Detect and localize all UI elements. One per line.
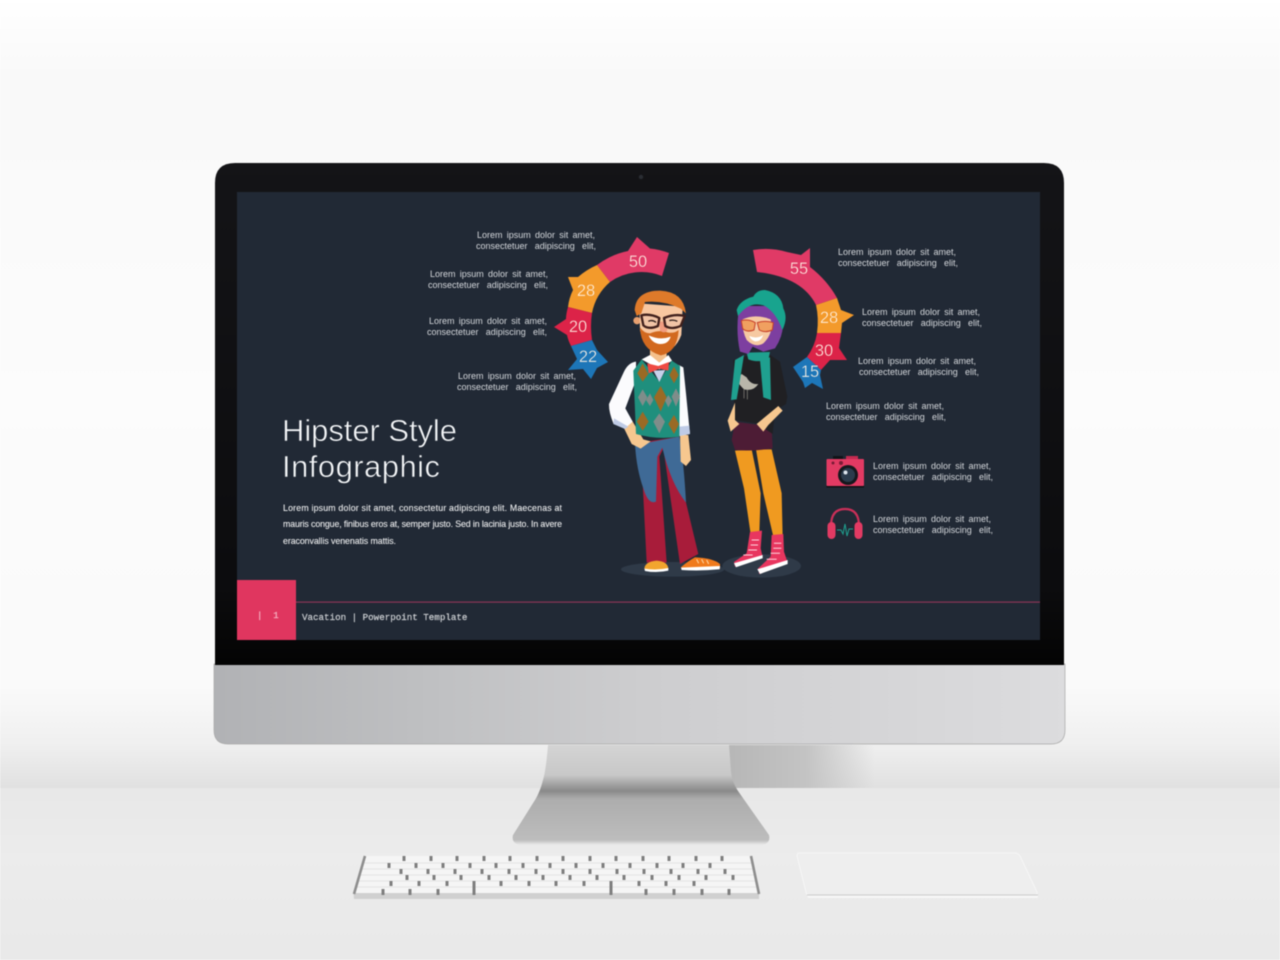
title: Infographic xyxy=(282,449,440,484)
left callouts: Lorem ipsum dolor sit amet, xyxy=(430,269,548,279)
footer page block xyxy=(237,580,296,640)
left callouts: Lorem ipsum dolor sit amet, xyxy=(429,316,547,326)
right callouts: Lorem ipsum dolor sit amet, xyxy=(838,247,956,257)
webcam xyxy=(639,175,643,179)
footer xyxy=(237,580,1040,640)
man arms xyxy=(609,362,691,466)
monitor stand xyxy=(513,745,769,845)
segment 55 xyxy=(753,248,837,305)
value labels: 22 xyxy=(579,348,597,366)
left callouts: consectetuer adipiscing elit, xyxy=(457,382,577,392)
man head xyxy=(633,291,686,355)
value labels: 50 xyxy=(629,253,647,271)
monitor bezel xyxy=(215,163,1064,665)
left callouts xyxy=(427,230,596,392)
woman arms xyxy=(728,403,783,432)
segment 22 xyxy=(568,340,608,379)
right callouts: consectetuer adipiscing elit, xyxy=(859,367,979,377)
left callouts: consectetuer adipiscing elit, xyxy=(427,327,547,337)
bird print xyxy=(736,374,758,399)
left callouts: Lorem ipsum dolor sit amet, xyxy=(458,371,576,381)
right callouts: Lorem ipsum dolor sit amet, xyxy=(862,307,980,317)
icon camera text: Lorem ipsum dolor sit amet, xyxy=(873,461,991,471)
left arc chart xyxy=(554,237,669,379)
segment 20 xyxy=(554,307,592,346)
slide screen xyxy=(237,192,1040,640)
title: Hipster Style xyxy=(282,413,457,448)
man shoes xyxy=(644,557,720,572)
monitor chin xyxy=(214,664,1065,744)
icon camera text: consectetuer adipiscing elit, xyxy=(873,472,993,482)
value labels: 20 xyxy=(569,318,587,336)
keyboard xyxy=(354,856,759,899)
value labels: 55 xyxy=(790,260,808,278)
icon headphones text: Lorem ipsum dolor sit amet, xyxy=(873,514,991,524)
segment 15 xyxy=(793,357,823,389)
icon headphones text xyxy=(873,514,993,535)
segment 28 xyxy=(816,298,854,333)
body paragraph xyxy=(283,503,563,546)
right arc chart xyxy=(753,248,854,389)
segment 50 xyxy=(597,237,669,282)
footer rule xyxy=(296,602,1040,603)
left callouts: consectetuer adipiscing elit, xyxy=(428,280,548,290)
man trousers xyxy=(635,437,698,564)
right callouts: consectetuer adipiscing elit, xyxy=(838,258,958,268)
man vest xyxy=(633,359,680,438)
right callouts: consectetuer adipiscing elit, xyxy=(826,412,946,422)
right callouts: Lorem ipsum dolor sit amet, xyxy=(858,356,976,366)
icon headphones text: consectetuer adipiscing elit, xyxy=(873,525,993,535)
value labels xyxy=(790,260,838,381)
body paragraph: eraconvallis venenatis mattis. xyxy=(283,536,396,546)
right callouts: consectetuer adipiscing elit, xyxy=(862,318,982,328)
left callouts: Lorem ipsum dolor sit amet, xyxy=(477,230,595,240)
segment 30 xyxy=(807,333,847,370)
woman legs xyxy=(735,449,783,537)
body paragraph: Lorem ipsum dolor sit amet, consectetur adipiscing elit. Maecenas at xyxy=(283,503,563,513)
value labels: 30 xyxy=(815,342,833,360)
left callouts: consectetuer adipiscing elit, xyxy=(476,241,596,251)
value labels: 28 xyxy=(577,282,595,300)
woman skirt xyxy=(732,422,773,451)
right callouts xyxy=(826,247,982,422)
man collar and bow tie xyxy=(642,347,672,382)
page number: | 1 xyxy=(257,611,279,621)
value labels: 28 xyxy=(820,309,838,327)
segment 28 xyxy=(568,265,610,313)
right callouts: Lorem ipsum dolor sit amet, xyxy=(826,401,944,411)
icon: headphones xyxy=(828,509,862,539)
title xyxy=(282,413,457,484)
footer text: Vacation | Powerpoint Template xyxy=(302,612,467,623)
character: hipster man xyxy=(609,291,724,577)
character: hipster woman xyxy=(722,290,801,578)
woman boots xyxy=(734,531,788,574)
woman top xyxy=(733,355,787,434)
icon camera text xyxy=(873,461,993,482)
woman head xyxy=(737,290,786,354)
value labels: 15 xyxy=(801,363,819,381)
value labels xyxy=(569,253,647,366)
trackpad xyxy=(797,853,1038,898)
body paragraph: mauris congue, finibus eros at, semper justo. Sed in lacinia justo. In avere xyxy=(283,519,562,529)
woman scarf xyxy=(731,352,771,400)
icon: camera xyxy=(826,456,864,488)
